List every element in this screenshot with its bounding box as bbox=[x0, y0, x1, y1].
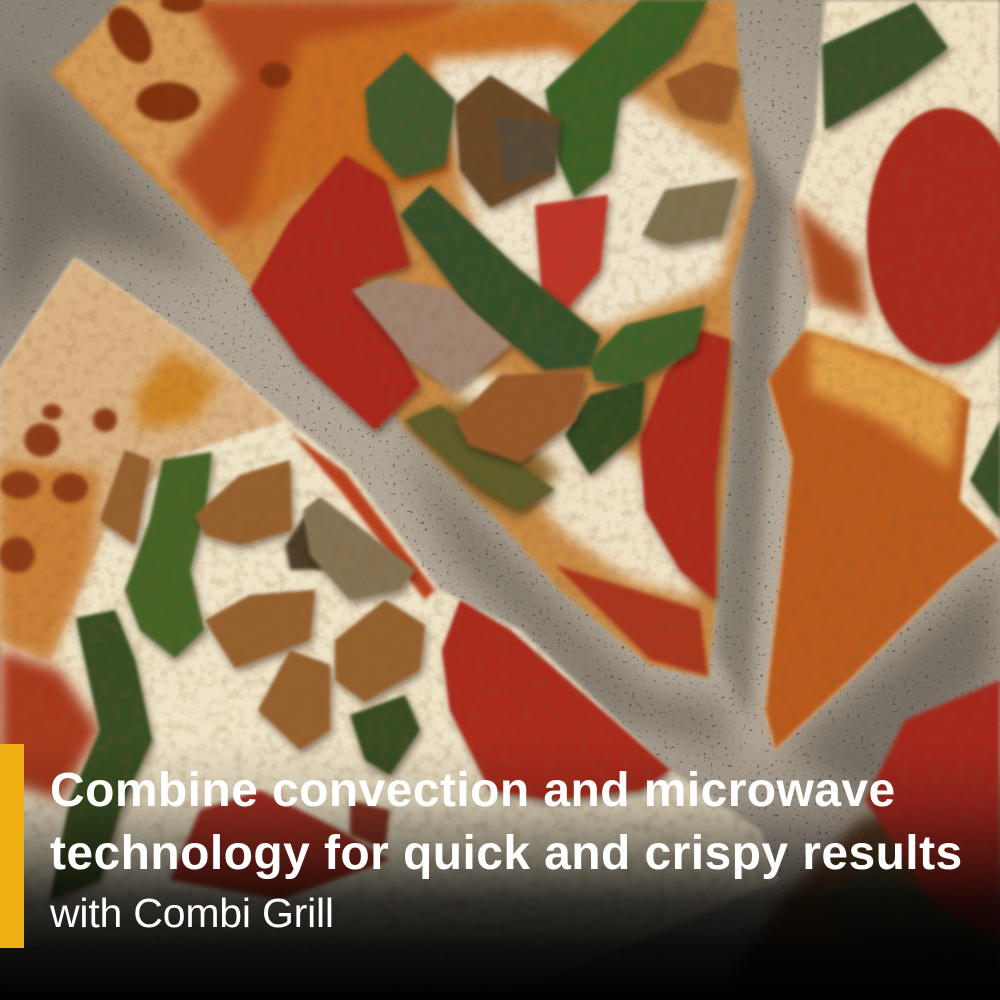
heading bbox=[50, 764, 963, 880]
crust browned spots bbox=[0, 404, 117, 573]
pizza slice: bottom right corner bbox=[720, 680, 1000, 1000]
pizza slice: top centre bbox=[50, 0, 755, 678]
sausage bbox=[100, 450, 425, 750]
pepperoni bbox=[867, 108, 1000, 364]
subheading: with Combi Grill bbox=[50, 890, 334, 936]
onion and mushroom bbox=[352, 75, 738, 390]
pizza slice: right bbox=[765, 0, 1000, 750]
green peppers bbox=[50, 452, 420, 900]
sausage bbox=[455, 62, 738, 462]
bottom dark gradient bbox=[0, 740, 1000, 1000]
green peppers bbox=[365, 0, 708, 510]
crust browned spots bbox=[99, 0, 291, 122]
pepperoni bbox=[442, 600, 670, 800]
mushroom bbox=[285, 515, 325, 570]
pizza slice: left bbox=[0, 258, 780, 1000]
pepperoni bbox=[250, 155, 420, 430]
heading: technology for quick and crispy results bbox=[50, 827, 963, 880]
yellow accent bar bbox=[0, 744, 24, 948]
heading: Combine convection and microwave bbox=[50, 764, 896, 817]
green peppers bbox=[822, 2, 948, 130]
